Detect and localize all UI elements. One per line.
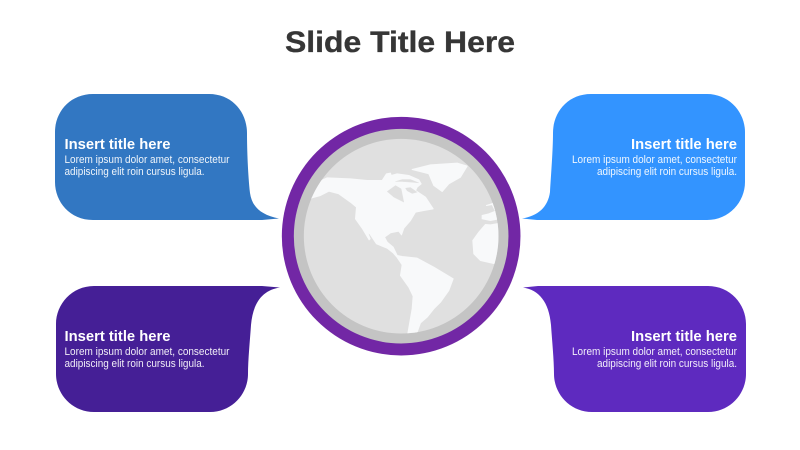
- map: Africa: [472, 223, 498, 264]
- panel: top left callout: [55, 94, 279, 220]
- text block: bottom left: [64, 346, 230, 370]
- heading: top left: Insert title here: [64, 137, 170, 153]
- text block: bottom right: [572, 346, 737, 370]
- map: Hudson Bay: [387, 179, 419, 202]
- text block: top right: [572, 154, 737, 178]
- text block: top left: Lorem ipsum dolor amet, consectetur: [64, 154, 230, 166]
- text block: top right: adipiscing elit roin cursus ligula.: [597, 166, 737, 178]
- text block: bottom left: adipiscing elit roin cursus ligula.: [64, 358, 204, 370]
- icon: globe: [282, 117, 520, 355]
- heading: top right: Insert title here: [631, 137, 737, 153]
- map: Greenland: [412, 163, 467, 191]
- heading: bottom right: Insert title here: [631, 329, 737, 345]
- text block: bottom left: Lorem ipsum dolor amet, consectetur: [64, 346, 230, 358]
- map: continents: [304, 163, 507, 335]
- panel: top right callout: [522, 94, 745, 220]
- panel: bottom right callout: [523, 286, 746, 412]
- text block: top left: adipiscing elit roin cursus ligula.: [64, 166, 204, 178]
- text block: bottom right: adipiscing elit roin cursus ligula.: [597, 358, 737, 370]
- text block: bottom right: Lorem ipsum dolor amet, consectetur: [572, 346, 737, 358]
- map: the Americas: [304, 173, 453, 335]
- map: Europe: [482, 203, 497, 221]
- panel: bottom left callout: [56, 286, 280, 412]
- text block: top right: Lorem ipsum dolor amet, consectetur: [572, 154, 737, 166]
- text block: top left: [64, 154, 230, 178]
- heading: bottom left: Insert title here: [64, 329, 170, 345]
- title: Slide Title Here: [285, 26, 515, 59]
